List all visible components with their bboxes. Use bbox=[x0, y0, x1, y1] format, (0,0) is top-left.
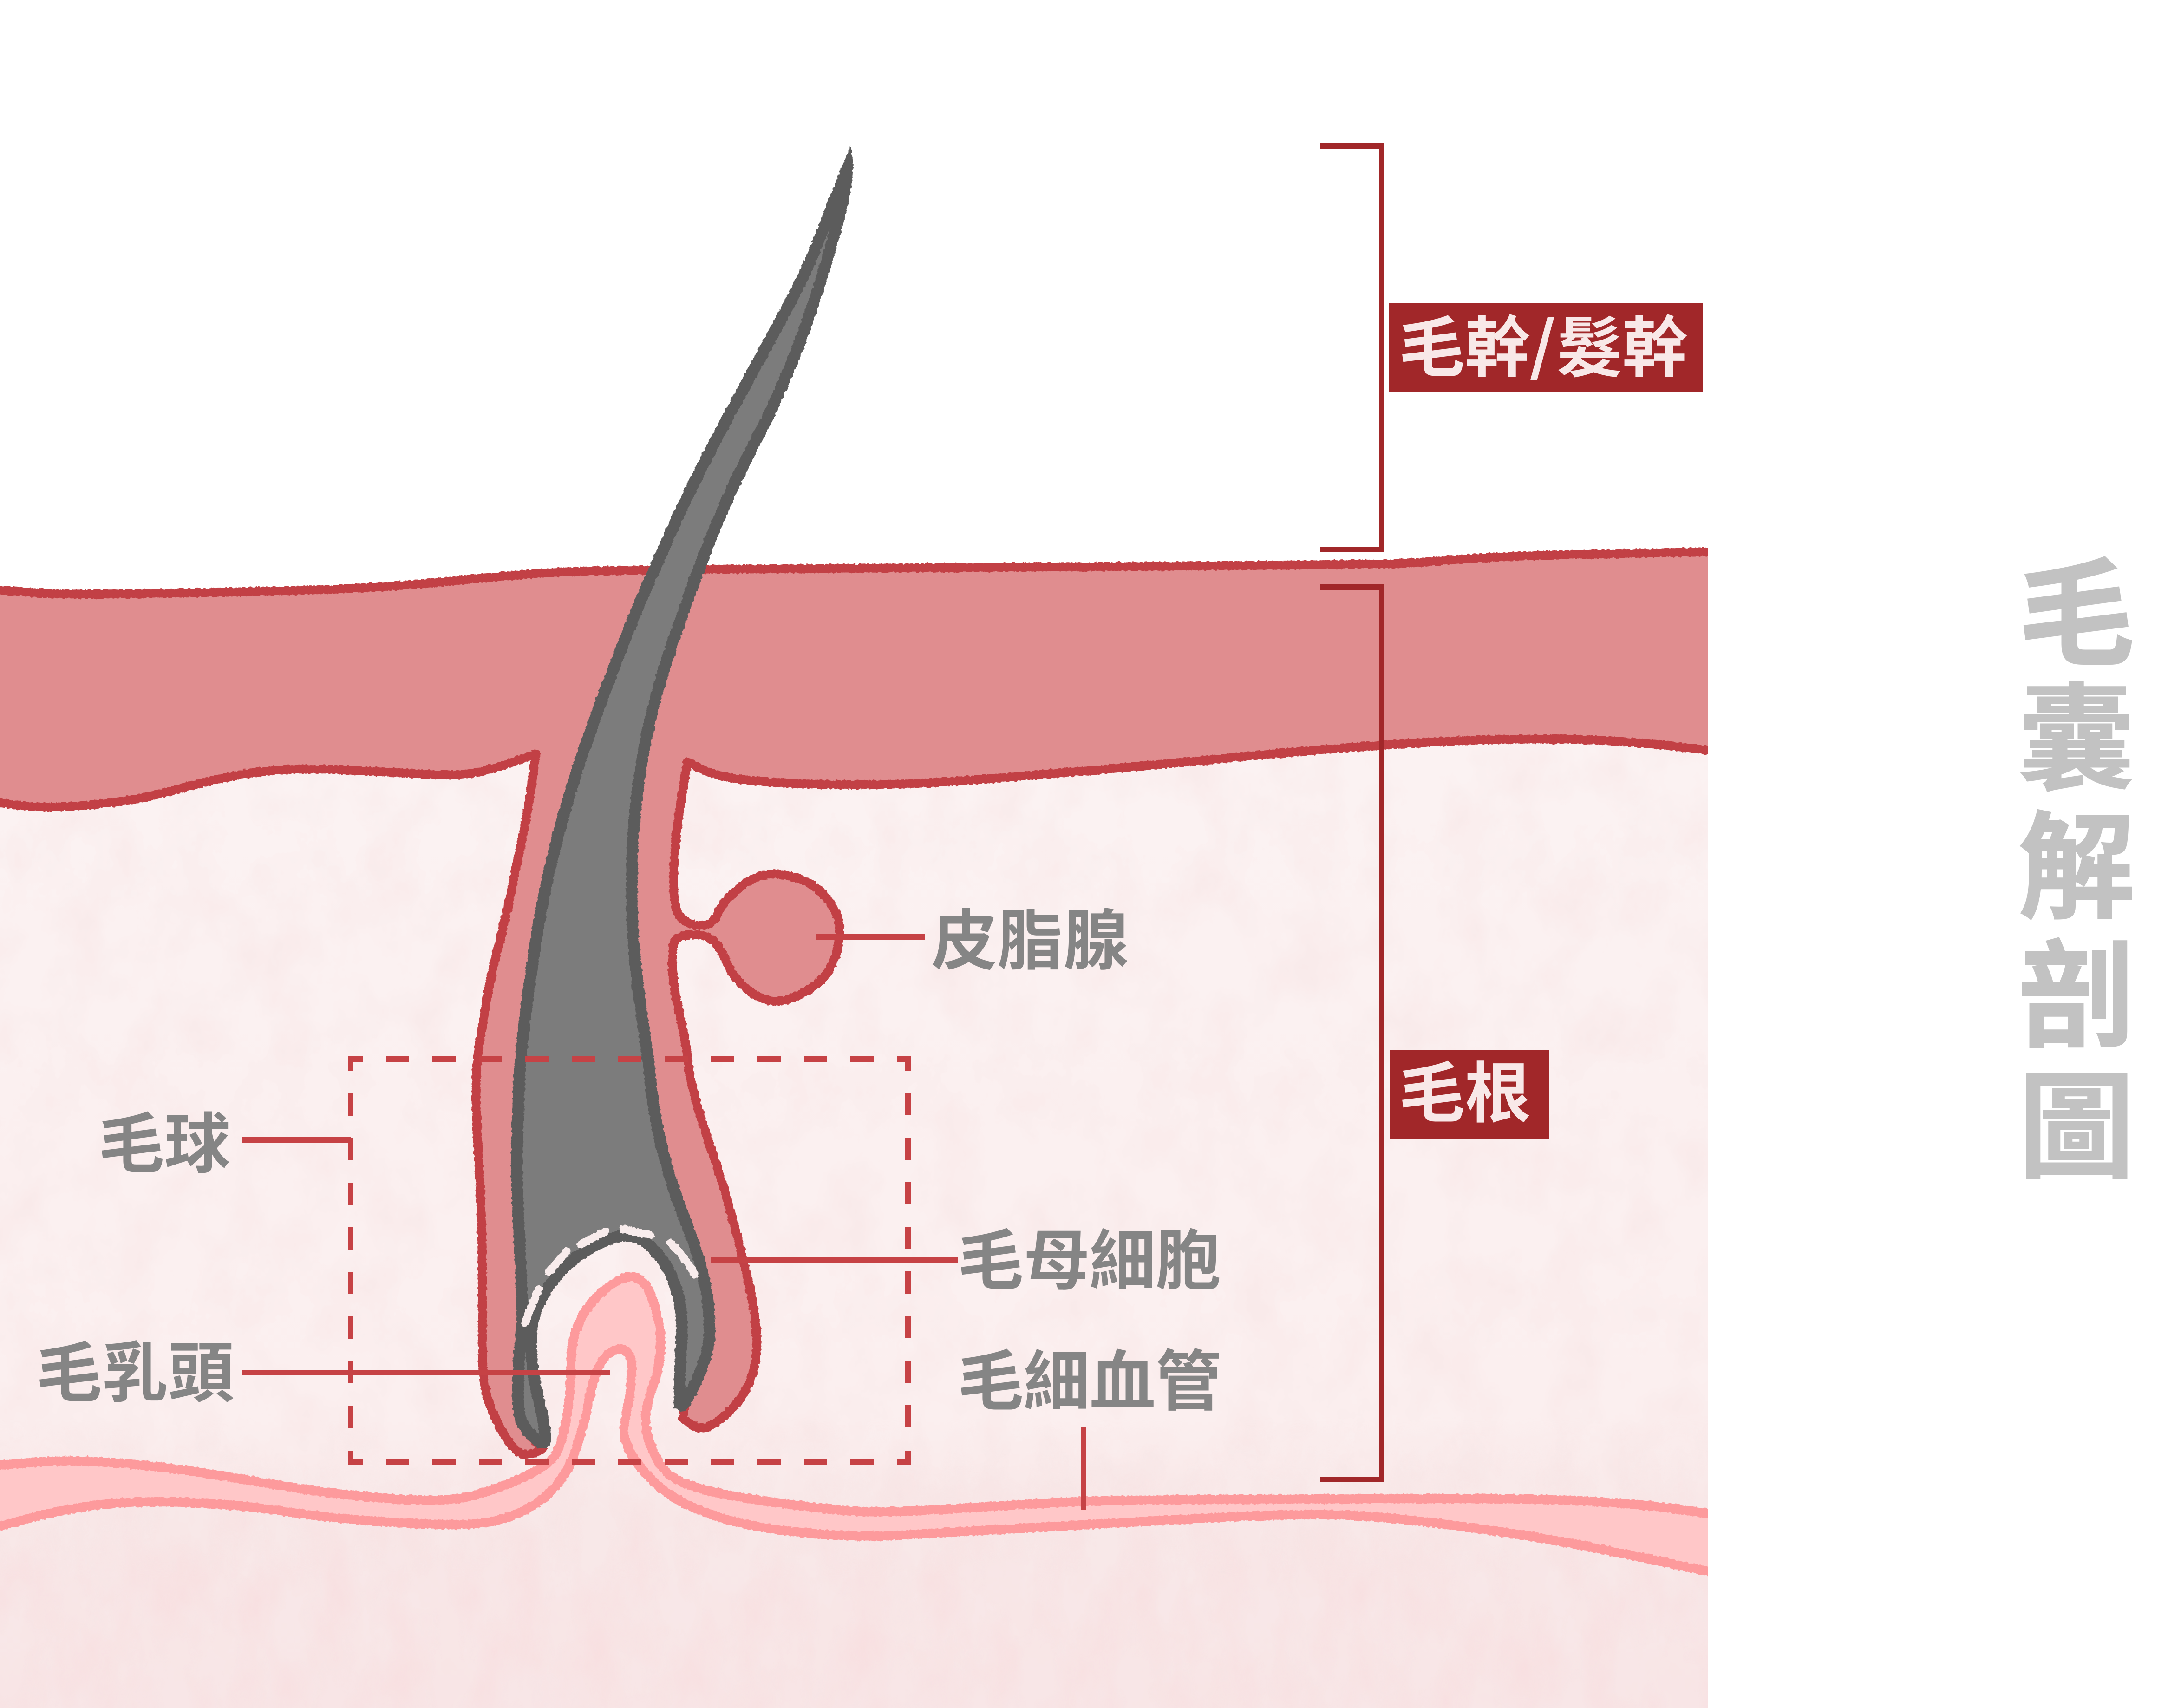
label: sebaceous gland: 皮脂腺 bbox=[931, 904, 1129, 978]
badge: hair root: 毛根 bbox=[1399, 1057, 1531, 1131]
vertical title: 解 bbox=[2018, 804, 2135, 933]
hair matrix cells dashed arc bbox=[525, 1229, 694, 1323]
bracket: hair root bbox=[1320, 587, 1382, 1479]
badge: hair root bbox=[1390, 1050, 1549, 1139]
vertical title: 剖 bbox=[2018, 932, 2135, 1062]
badge: hair shaft bbox=[1389, 302, 1703, 398]
vertical title: 毛 bbox=[2018, 550, 2135, 680]
dermis layer bbox=[0, 720, 1708, 1708]
leader line: hair bulb bbox=[242, 1137, 351, 1143]
hair shaft and root bbox=[511, 146, 853, 1449]
hair bulb dashed box bbox=[351, 1059, 908, 1462]
vertical title: 圖 bbox=[2018, 1063, 2135, 1193]
label: hair bulb: 毛球 bbox=[98, 1108, 230, 1182]
leader line: matrix cells bbox=[711, 1257, 958, 1263]
badge: hair shaft: 毛幹 bbox=[1399, 312, 1531, 386]
label: matrix cells: 毛母細胞 bbox=[958, 1224, 1221, 1298]
capillary vessel bbox=[0, 1276, 1723, 1575]
label: capillary: 毛細血管 bbox=[958, 1345, 1221, 1419]
leader line: dermal papilla bbox=[242, 1370, 610, 1375]
leader line: sebaceous gland bbox=[816, 934, 925, 940]
badge: hair shaft: / bbox=[1530, 302, 1554, 398]
badge: hair shaft: 髮幹 bbox=[1556, 312, 1688, 386]
epidermis, follicle sheath and sebaceous gland bbox=[0, 551, 1723, 1454]
leader line: capillary bbox=[1081, 1427, 1086, 1510]
label: dermal papilla: 毛乳頭 bbox=[36, 1337, 234, 1411]
vertical title: 囊 bbox=[2018, 675, 2135, 805]
bracket: hair shaft bbox=[1320, 146, 1382, 550]
